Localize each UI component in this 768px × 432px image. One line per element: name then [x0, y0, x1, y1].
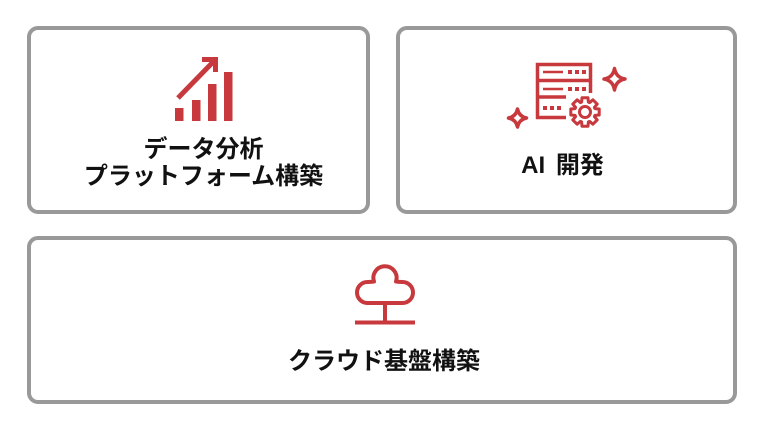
- heading: data analytics platform: プラットフォーム構築: [84, 163, 323, 190]
- heading: data analytics platform: [84, 136, 323, 190]
- panel: data analytics platform: [27, 26, 370, 214]
- heading: data analytics platform: データ分析: [144, 136, 264, 163]
- panel: cloud infrastructure: [27, 236, 737, 404]
- heading: cloud infrastructure: クラウド基盤構築: [288, 348, 480, 375]
- heading: AI development: AI 開発: [521, 152, 604, 179]
- panel: AI development: [396, 26, 737, 214]
